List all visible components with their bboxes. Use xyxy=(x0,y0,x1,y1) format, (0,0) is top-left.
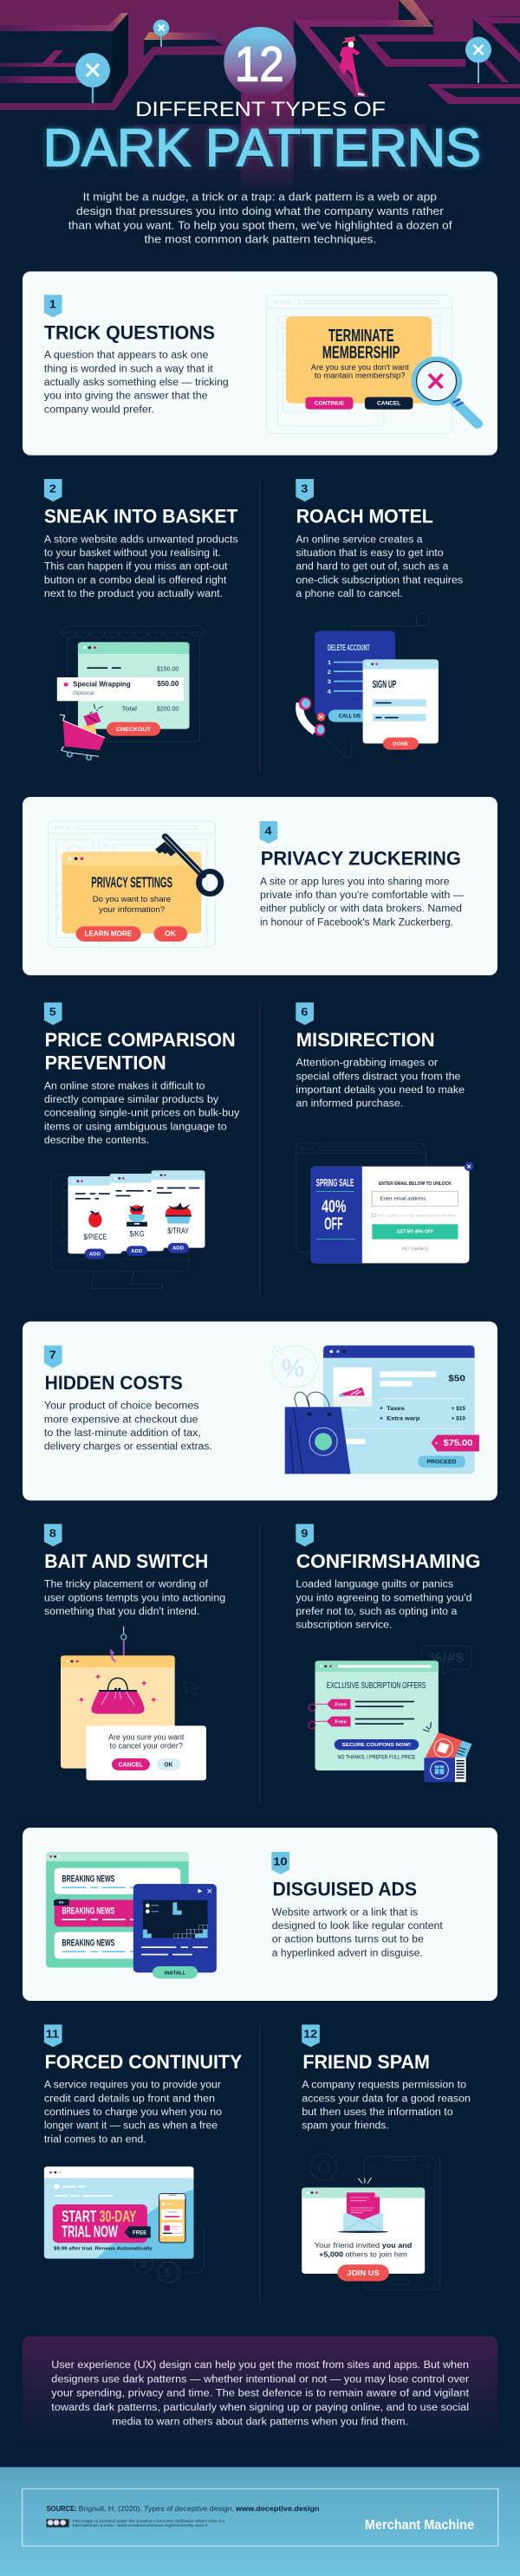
illustration: terminate membership dialog: to mantain membership? xyxy=(315,372,406,380)
description: price comparison prevention: items or using ambiguous language to xyxy=(44,1121,227,1132)
illustration: free trial window: $ xyxy=(164,2267,172,2279)
description xyxy=(272,1906,443,1958)
intro text: than what you want. To help you spot them, we've highlighted a dozen of xyxy=(68,219,452,231)
description: A question that appears to ask one xyxy=(44,349,208,360)
illustration: checkout with shopping bag: + $15 xyxy=(452,1405,465,1412)
illustration: terminate membership dialog: Are you sure you don't want xyxy=(311,364,409,372)
heading: price comparison prevention: PRICE COMPARISON xyxy=(45,1029,236,1052)
header maze illustration xyxy=(0,0,520,346)
illustration: checkout with shopping bag: PROCEED xyxy=(426,1460,457,1466)
illustration: hook, purse and cancel dialog: to cancel your order? xyxy=(110,1742,183,1751)
badge 3: 3 xyxy=(301,482,309,495)
illustration: hook, purse and cancel dialog: OK xyxy=(164,1761,173,1768)
description: forced continuity xyxy=(44,2079,222,2145)
illustration: checkout with shopping bag: + $10 xyxy=(452,1415,465,1422)
description: price comparison prevention: An online store makes it difficult to xyxy=(44,1080,205,1091)
illustration: spring sale popup: OFF xyxy=(324,1214,343,1233)
description: price comparison prevention: describe the contents. xyxy=(44,1135,149,1146)
badge 3 xyxy=(296,479,314,502)
description: forced continuity: continues to charge you when you no xyxy=(44,2107,222,2118)
illustration: terminate membership dialog xyxy=(267,295,478,434)
panel: trick questions xyxy=(23,271,497,456)
illustration: breaking news with game ad: BREAKING NEWS xyxy=(62,1873,114,1884)
description: sneak into basket: This can happen if you miss an opt-out xyxy=(44,560,228,572)
description: confirmshaming: prefer not to, such as opting into a xyxy=(296,1606,457,1617)
description: roach motel: one-click subscription that requires xyxy=(296,574,463,586)
heading: misdirection: MISDIRECTION xyxy=(296,1029,435,1052)
description: or action buttons turns out to be xyxy=(272,1933,424,1945)
illustration: spring sale popup: NO THANKS xyxy=(402,1247,428,1252)
illustration: free trial window xyxy=(44,2166,204,2282)
heading: price comparison prevention: PREVENTION xyxy=(45,1052,166,1074)
description: Your product of choice becomes xyxy=(44,1400,199,1411)
description: roach motel xyxy=(296,534,463,599)
illustration: terminate membership dialog: CANCEL xyxy=(377,401,400,406)
illustration: subscription offers with coupons: %!#$ xyxy=(429,1651,464,1666)
badge 12 xyxy=(302,2024,320,2047)
illustration: friend invite email: +5,000 xyxy=(319,2250,343,2258)
panel: forced continuity and friend spam xyxy=(44,2024,471,2304)
description: forced continuity: trial comes to an end. xyxy=(44,2133,146,2145)
closing text: towards dark patterns, particularly when signing up or paying online, and to use social xyxy=(51,2402,469,2413)
description: bait and switch xyxy=(44,1578,225,1617)
illustration: spring sale popup: Enter email address xyxy=(380,1196,426,1201)
description: confirmshaming: Loaded language guilts or panics xyxy=(296,1578,453,1589)
description: roach motel: An online service creates a xyxy=(296,534,423,545)
description: sneak into basket: button or a combo deal is offered right xyxy=(44,574,227,586)
heading: sneak into basket: SNEAK INTO BASKET xyxy=(44,506,238,527)
illustration: friend invite email: you and xyxy=(382,2242,413,2249)
illustration: checkout with shopping bag: $50 xyxy=(448,1374,465,1383)
description: sneak into basket: to your basket without you realising it. xyxy=(44,547,221,559)
illustration: breaking news with game ad: AD xyxy=(59,1900,63,1905)
heading: friend spam: FRIEND SPAM xyxy=(302,2051,430,2074)
closing panel background xyxy=(23,2336,497,2445)
illustration: terminate membership dialog: MEMBERSHIP xyxy=(322,343,400,362)
logo: merchant machine: Merchant Machine xyxy=(365,2516,474,2533)
description: friend spam: spam your friends. xyxy=(302,2120,389,2131)
closing text xyxy=(51,2359,470,2427)
illustration: terminate membership dialog: CONTINUE xyxy=(315,401,345,406)
panel: privacy zuckering xyxy=(23,797,497,975)
description: confirmshaming: you into agreeing to something you'd xyxy=(296,1592,472,1603)
illustration: subscription offers with coupons: SECURE COUPONS NOW! xyxy=(342,1743,411,1748)
badge 7: 7 xyxy=(49,1349,56,1361)
illustration: free trial window: FREE xyxy=(133,2230,147,2236)
card background xyxy=(23,1828,497,2001)
description xyxy=(260,876,465,928)
illustration: privacy settings with key: Do you want to share xyxy=(93,896,171,904)
description: friend spam: but then uses the information to xyxy=(302,2107,453,2118)
badge 2 xyxy=(44,479,62,502)
panel: bait and switch and confirmshaming xyxy=(44,1524,480,1803)
badge 11 xyxy=(44,2024,62,2047)
heading: HIDDEN COSTS xyxy=(45,1372,183,1395)
badge 6 xyxy=(296,1002,314,1025)
heading: bait and switch: BAIT AND SWITCH xyxy=(44,1550,208,1573)
footer source box: Brignull, H. (2020). Types of deceptive design. xyxy=(79,2505,234,2513)
illustration: product price cards on monitor: ADD xyxy=(172,1246,185,1252)
heading: forced continuity: FORCED CONTINUITY xyxy=(45,2051,242,2074)
footer source box: SOURCE: xyxy=(47,2505,77,2513)
icon: pin small xyxy=(153,20,169,47)
badge 5 xyxy=(44,1002,62,1025)
illustration: spring sale popup: Yes, I'd like to receive news and special offers. xyxy=(377,1214,458,1217)
illustration: privacy settings with key xyxy=(48,821,221,948)
card background xyxy=(23,271,497,456)
illustration: delete account and sign up: 4 xyxy=(328,689,331,695)
description xyxy=(44,1400,212,1452)
illustration: delete account and sign up: CALL US xyxy=(339,714,361,720)
badge 9 xyxy=(296,1524,314,1546)
illustration: breaking news with game ad: BREAKING NEWS xyxy=(62,1937,114,1948)
badge 4 xyxy=(260,821,277,844)
illustration: delete account and sign up: DELETE ACCOUNT xyxy=(328,644,370,653)
description: forced continuity: A service requires you to provide your xyxy=(44,2079,221,2090)
closing text: User experience (UX) design can help you get the most from sites and apps. But when xyxy=(51,2359,469,2371)
badge 8 xyxy=(44,1524,62,1546)
closing panel and footer xyxy=(0,2336,520,2576)
illustration: checkout with cart: Optional xyxy=(73,690,94,696)
description: price comparison prevention: concealing single-unit prices on bulk-buy xyxy=(44,1107,240,1118)
card background xyxy=(23,797,497,975)
illustration: friend invite email: Your friend invited xyxy=(315,2242,380,2249)
footer source box: This image is licensed under the Creative Commons Attribution-Share Alike 4.0 xyxy=(72,2519,224,2523)
illustration: checkout with cart: $200.00 xyxy=(157,705,179,713)
badge 7 xyxy=(44,1345,62,1368)
illustration: subscription offers with coupons: Free xyxy=(335,1702,348,1707)
badge 6: 6 xyxy=(301,1006,309,1018)
description: roach motel: a phone call to cancel. xyxy=(296,588,403,599)
description: forced continuity: credit card details up front and then xyxy=(44,2093,215,2104)
footer source box: www.deceptive.design xyxy=(235,2505,319,2513)
illustration: privacy settings with key: LEARN MORE xyxy=(85,929,132,938)
illustration: breaking news with game ad: BREAKING NEWS xyxy=(62,1905,114,1916)
badge 10 xyxy=(271,1852,289,1874)
description: company would prefer. xyxy=(44,404,154,415)
illustration: checkout with shopping bag xyxy=(271,1345,479,1474)
description: misdirection xyxy=(296,1057,465,1109)
icon: pin left xyxy=(75,53,110,103)
heading: DISGUISED ADS xyxy=(273,1879,417,1900)
illustration: product price cards on monitor: $/PIECE xyxy=(83,1233,107,1242)
heading: TRICK QUESTIONS xyxy=(44,322,215,344)
badge 4: 4 xyxy=(265,825,272,837)
illustration: checkout with shopping bag: $75.00 xyxy=(444,1439,472,1448)
illustration: checkout with cart: $50.00 xyxy=(157,680,179,688)
description: misdirection: Attention-grabbing images or xyxy=(296,1057,438,1068)
description: bait and switch: user options tempts you into actioning xyxy=(44,1592,225,1603)
footer source box: International License - www.creativecommons.org/licenses/by-sa/4.0 xyxy=(72,2523,208,2527)
illustration: free trial window: START 30-DAY xyxy=(62,2208,137,2226)
illustration: hook, purse and cancel dialog: CANCEL xyxy=(119,1761,143,1768)
description: delivery charges or essential extras. xyxy=(44,1440,212,1452)
description: roach motel: and hard to get out of, such as a xyxy=(296,560,448,572)
intro text xyxy=(68,191,452,245)
illustration: free trial window: $ xyxy=(140,2258,147,2269)
illustration: free trial window: $9.99 after trial. Renews Automatically xyxy=(54,2246,153,2251)
description: misdirection: an informed purchase. xyxy=(296,1097,403,1109)
description: sneak into basket: A store website adds unwanted products xyxy=(44,534,238,545)
illustration: friend invite email: JOIN US xyxy=(347,2269,380,2277)
description: misdirection: special offers distract you from the xyxy=(296,1071,461,1082)
illustration: subscription offers with coupons: NO THANKS, I PREFER FULL PRICE xyxy=(338,1755,416,1761)
description: sneak into basket xyxy=(44,534,238,599)
description: friend spam: access your data for a good reason xyxy=(302,2093,471,2104)
title block xyxy=(43,36,481,245)
description: sneak into basket: next to the product you actually want. xyxy=(44,588,223,599)
heading: price comparison prevention xyxy=(45,1029,236,1074)
description: designed to look like regular content xyxy=(272,1920,443,1932)
illustration: privacy settings with key: OK xyxy=(165,929,176,938)
illustration: hook, purse and cancel dialog xyxy=(61,1627,206,1780)
illustration: subscription offers with coupons: Free xyxy=(335,1719,348,1725)
illustration: spring sale popup: ENTER EMAIL BELOW TO UNLOCK xyxy=(379,1181,452,1187)
illustration: product price cards on monitor: $/KG xyxy=(130,1230,144,1239)
illustration: checkout with cart xyxy=(57,626,206,760)
icon: creative commons xyxy=(47,2519,69,2527)
illustration: privacy settings with key: PRIVACY SETTINGS xyxy=(91,874,172,890)
description: in honour of Facebook's Mark Zuckerberg. xyxy=(260,916,453,928)
panel: sneak into basket and roach motel xyxy=(44,479,463,772)
description: bait and switch: The tricky placement or wording of xyxy=(44,1578,208,1589)
badge 11: 11 xyxy=(46,2029,60,2040)
illustration: delete account and sign up: 3 xyxy=(328,678,331,685)
number circle: 12 xyxy=(224,27,296,97)
title line: DIFFERENT TYPES OF xyxy=(135,99,386,121)
illustration: delete account and sign up: DONE xyxy=(393,741,408,748)
illustration: checkout with cart: CHECKOUT xyxy=(116,726,152,733)
illustration: product price cards on monitor: $/TRAY xyxy=(167,1227,190,1236)
badge 10: 10 xyxy=(273,1855,288,1867)
illustration: privacy settings with key: your information? xyxy=(99,906,166,915)
illustration: product price cards on monitor xyxy=(51,1170,205,1289)
description: either publicly or with data brokers. Named xyxy=(260,903,462,914)
illustration: delete account and sign up: 1 xyxy=(328,659,331,666)
description: thing is worded in such a way that it xyxy=(44,363,213,374)
badge 12: 12 xyxy=(303,2029,318,2040)
closing text: your spending, privacy and time. The best defence is to remain aware of and vigilant xyxy=(51,2387,470,2398)
footer source box xyxy=(23,2489,498,2546)
description xyxy=(44,349,229,415)
description: to the last-minute addition of tax, xyxy=(44,1427,201,1439)
description: confirmshaming: subscription service. xyxy=(296,1619,392,1630)
badge 9: 9 xyxy=(301,1528,309,1539)
badge 8: 8 xyxy=(49,1528,56,1539)
illustration: friend invite email xyxy=(302,2153,440,2289)
illustration: product price cards on monitor: ADD xyxy=(131,1248,143,1254)
description: friend spam xyxy=(302,2079,471,2131)
description: confirmshaming xyxy=(296,1578,472,1630)
description: a hyperlinked advert in disguise. xyxy=(272,1947,423,1958)
description: A site or app lures you into sharing more xyxy=(260,876,450,887)
panel: hidden costs xyxy=(23,1322,497,1500)
description: price comparison prevention xyxy=(44,1080,240,1146)
heading: confirmshaming: CONFIRMSHAMING xyxy=(296,1550,480,1573)
illustration: spring sale popup xyxy=(296,1143,473,1263)
illustration: checkout with shopping bag: % xyxy=(281,1353,304,1382)
illustration: friend invite email: others to join him xyxy=(345,2250,407,2258)
panel: disguised ads xyxy=(23,1828,497,2001)
illustration: free trial window: TRIAL NOW xyxy=(62,2223,118,2241)
closing text: designers use dark patterns — whether intentional or not — you may lose control over xyxy=(51,2373,469,2385)
description: price comparison prevention: directly compare similar products by xyxy=(44,1094,219,1105)
illustration: breaking news with game ad xyxy=(46,1852,217,1978)
illustration: delete account and sign up: SIGN UP xyxy=(373,678,396,690)
description: bait and switch: something that you didn't intend. xyxy=(44,1606,199,1617)
illustration: subscription offers with coupons xyxy=(309,1646,472,1782)
illustration: checkout with cart: $150.00 xyxy=(157,665,179,672)
illustration: spring sale popup: 40% xyxy=(322,1197,346,1216)
card background xyxy=(23,1322,497,1500)
icon: pin right xyxy=(465,36,491,83)
icon: running man xyxy=(339,37,365,96)
intro text: It might be a nudge, a trick or a trap: a dark pattern is a web or app xyxy=(83,191,437,203)
illustration: checkout with cart: Special Wrapping xyxy=(73,680,131,689)
badge 5: 5 xyxy=(49,1006,56,1018)
intro text: design that pressures you into doing what the company wants rather xyxy=(76,205,444,217)
illustration: spring sale popup: SPRING SALE xyxy=(316,1176,354,1188)
badge 1 xyxy=(44,294,62,317)
illustration: spring sale popup: GET MY 40% OFF xyxy=(397,1230,434,1234)
description: forced continuity: longer want it — such as when a free xyxy=(44,2120,218,2131)
illustration: product price cards on monitor: ADD xyxy=(89,1252,101,1257)
footer band xyxy=(0,2467,520,2576)
illustration: delete account and sign up xyxy=(299,612,439,758)
description: friend spam: A company requests permission to xyxy=(302,2079,466,2090)
description: you into giving the answer that the xyxy=(44,390,208,401)
illustration: subscription offers with coupons: EXCLUSIVE SUBCRIPTION OFFERS xyxy=(327,1682,426,1691)
intro text: the most common dark pattern techniques. xyxy=(144,234,376,245)
badge 1: 1 xyxy=(49,299,56,310)
description: roach motel: situation that is easy to get into xyxy=(296,547,444,559)
illustration: checkout with shopping bag: Taxes xyxy=(387,1405,405,1412)
illustration: hook, purse and cancel dialog: Are you sure you want xyxy=(108,1733,185,1742)
illustration: terminate membership dialog: TERMINATE xyxy=(328,326,394,346)
description: misdirection: important details you need to make xyxy=(296,1084,465,1096)
illustration: breaking news with game ad: INSTALL xyxy=(165,1971,186,1976)
heading: PRIVACY ZUCKERING xyxy=(261,848,461,870)
illustration: delete account and sign up: 2 xyxy=(328,669,331,676)
heading: roach motel: ROACH MOTEL xyxy=(296,506,433,527)
description: private info than you're comfortable with — xyxy=(260,890,465,901)
badge 2: 2 xyxy=(49,482,56,495)
illustration: checkout with cart: Total xyxy=(121,705,137,713)
description: actually asks something else — tricking xyxy=(44,377,229,388)
title number: 12 xyxy=(235,36,284,91)
illustration: checkout with shopping bag: Extra warp xyxy=(387,1415,420,1422)
description: more expensive at checkout due xyxy=(44,1414,198,1425)
description: Website artwork or a link that is xyxy=(272,1906,418,1918)
panel: price comparison prevention and misdirection xyxy=(44,1002,473,1295)
closing text: media to warn others about dark patterns when you find them. xyxy=(112,2416,408,2427)
